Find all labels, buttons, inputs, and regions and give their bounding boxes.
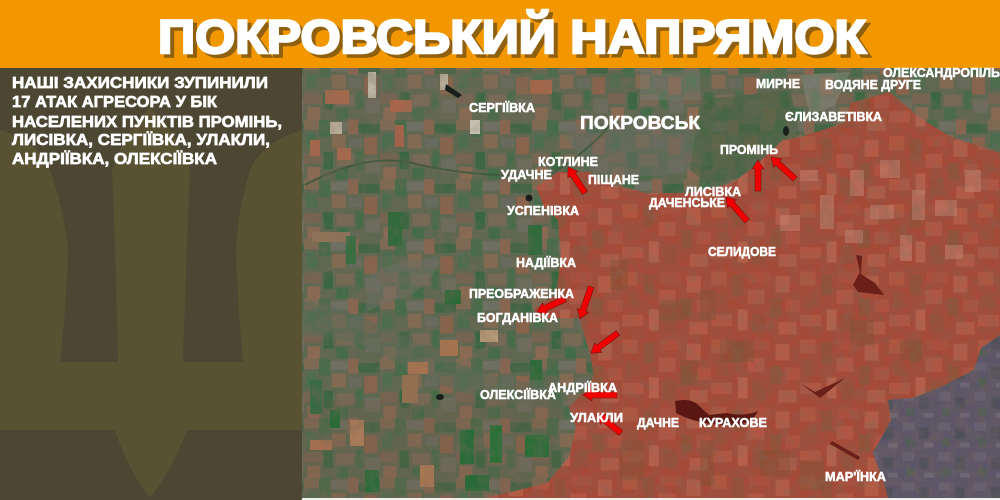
label: Andriivka: АНДРІЇВКА	[548, 380, 617, 395]
map	[302, 68, 1000, 500]
label: Promin: ПРОМІНЬ	[720, 143, 778, 157]
title: ПОКРОВСЬКИЙ НАПРЯМОК	[158, 10, 866, 63]
label: Pishchane: ПІЩАНЕ	[588, 173, 639, 187]
ponds	[436, 84, 789, 400]
bottom edge	[302, 498, 1000, 500]
hand-placed farm fields	[310, 72, 552, 492]
label: Dachne: ДАЧНЕ	[637, 416, 679, 430]
label: Marinka: МАР'ЇНКА	[825, 469, 886, 484]
attack arrows	[534, 153, 799, 438]
title shadow: ПОКРОВСЬКИЙ НАПРЯМОК	[162, 14, 870, 66]
text block: summary	[12, 75, 282, 168]
icon: trident watermark	[0, 108, 302, 498]
label: Myrne: МИРНЕ	[756, 77, 800, 91]
place labels	[469, 66, 1000, 484]
road line	[305, 125, 610, 185]
dark ravines	[800, 255, 884, 460]
label: Pokrovsk: ПОКРОВСЬК	[580, 113, 701, 133]
label: Selydove: СЕЛИДОВЕ	[708, 245, 776, 259]
arrow: Kotlyne	[563, 164, 590, 196]
reservoir	[675, 400, 758, 425]
text block: summary: ЛИСІВКА, СЕРГІЇВКА, УЛАКЛИ,	[12, 132, 270, 149]
arrow: central	[587, 328, 622, 358]
occupied territory	[486, 92, 1000, 498]
arrow: Lysivka	[721, 193, 752, 225]
label: Kotlyne: КОТЛИНЕ	[538, 155, 598, 169]
lighter fields in occupied territory	[780, 160, 981, 261]
arrow: Andriivka	[583, 389, 617, 401]
label: Lysivka: ЛИСІВКА	[685, 185, 741, 199]
label: Oleksandropil: ОЛЕКСАНДРОПІЛЬ	[883, 66, 1000, 80]
darker fields in occupied territory	[610, 260, 922, 490]
text block: summary: НАШІ ЗАХИСНИКИ ЗУПИНИЛИ	[12, 75, 268, 92]
label: Uspenivka: УСПЕНІВКА	[507, 204, 579, 218]
label: Oleksiivka: ОЛЕКСІЇВКА	[480, 387, 556, 402]
label: Udachne: УДАЧНЕ	[501, 168, 552, 182]
panel: summary	[0, 68, 302, 500]
satellite texture	[302, 68, 1000, 498]
arrow: Ulakly	[593, 409, 625, 438]
label: Kurakhove: КУРАХОВЕ	[699, 416, 767, 430]
label: Bohdanivka: БОГДАНІВКА	[477, 311, 558, 325]
arrow: Promin north	[752, 160, 764, 191]
arrow: Preobrazhenka	[534, 294, 568, 317]
occupied area: Maryinka district	[873, 335, 1000, 498]
text block: summary: АНДРІЇВКА, ОЛЕКСІЇВКА	[12, 151, 217, 168]
label: Dachenske: ДАЧЕНСЬКЕ	[649, 196, 725, 210]
arrow: Promin northwest	[767, 153, 799, 183]
label: Ulakly: УЛАКЛИ	[570, 411, 623, 425]
label: Serhiivka: СЕРГІЇВКА	[469, 100, 535, 115]
text block: summary: НАСЕЛЕНИХ ПУНКТІВ ПРОМІНЬ,	[12, 114, 282, 131]
label: Yelyzavetivka: ЄЛИЗАВЕТІВКА	[785, 110, 882, 124]
arrow: Bohdanivka south	[574, 285, 597, 321]
label: Vodiane Druhe: ВОДЯНЕ ДРУГЕ	[825, 78, 921, 92]
label: Nadiivka: НАДІЇВКА	[516, 255, 576, 270]
header banner	[0, 0, 1000, 68]
label: Preobrazhenka: ПРЕОБРАЖЕНКА	[469, 287, 574, 301]
urban and valley areas	[302, 68, 850, 498]
text block: summary: 17 АТАК АГРЕСОРА У БІК	[12, 94, 218, 111]
